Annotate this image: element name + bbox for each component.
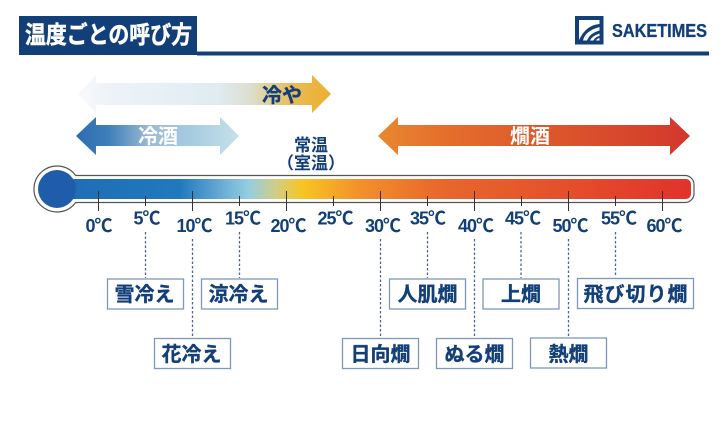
temperature labels: 50℃ (552, 216, 589, 236)
arrow: 冷や: 冷や (262, 84, 302, 107)
label: 人肌燗 (390, 279, 466, 309)
label: 花冷え: 花冷え (162, 343, 222, 366)
temperature labels: 45℃ (505, 208, 541, 228)
temperature labels (85, 208, 683, 236)
label: 上燗 (483, 279, 559, 309)
leader lines (146, 232, 616, 337)
label: 飛び切り燗 (578, 278, 694, 308)
label: 熱燗: 熱燗 (548, 343, 588, 366)
arrow: 冷酒: 冷酒 (138, 125, 178, 148)
arrow: 燗酒 (378, 117, 690, 155)
temperature labels: 10℃ (176, 216, 213, 236)
temperature labels: 20℃ (270, 216, 307, 236)
arrow: 燗酒: 燗酒 (510, 125, 550, 148)
temperature labels: 55℃ (601, 208, 637, 228)
label: ぬる燗: ぬる燗 (444, 343, 504, 366)
label: 雪冷え: 雪冷え (114, 283, 174, 306)
label: 人肌燗: 人肌燗 (398, 283, 458, 306)
title banner: 温度ごとの呼び方 (25, 21, 192, 49)
label: 雪冷え (108, 279, 184, 309)
temperature labels: 15℃ (225, 208, 261, 228)
temperature labels: 5℃ (133, 208, 161, 228)
arrow: 冷や (78, 75, 331, 113)
logo: SAKETIMES (575, 16, 707, 44)
temperature labels: 60℃ (646, 216, 683, 236)
thermometer scale (34, 166, 694, 212)
label: 常温（室温）: 常温 (294, 136, 328, 155)
label: 日向燗 (342, 338, 418, 368)
label: 熱燗 (530, 338, 606, 368)
temperature labels: 0℃ (85, 216, 113, 236)
label: 飛び切り燗: 飛び切り燗 (584, 283, 688, 306)
title banner (19, 16, 709, 56)
label: 常温（室温） (277, 136, 345, 173)
label: 涼冷え (202, 279, 278, 309)
label: 涼冷え: 涼冷え (208, 283, 268, 306)
arrow: 冷酒 (76, 117, 239, 155)
temperature labels: 40℃ (458, 216, 494, 236)
temperature labels: 25℃ (317, 208, 354, 228)
label: ぬる燗 (436, 338, 512, 368)
temperature labels: 30℃ (365, 216, 401, 236)
label: 常温（室温）: （室温） (277, 154, 345, 173)
logo: SAKETIMES: SAKETIMES (612, 21, 707, 41)
label: 上燗: 上燗 (501, 283, 541, 306)
temperature labels: 35℃ (410, 208, 446, 228)
label: 日向燗: 日向燗 (350, 343, 410, 366)
label: 花冷え (154, 338, 230, 368)
